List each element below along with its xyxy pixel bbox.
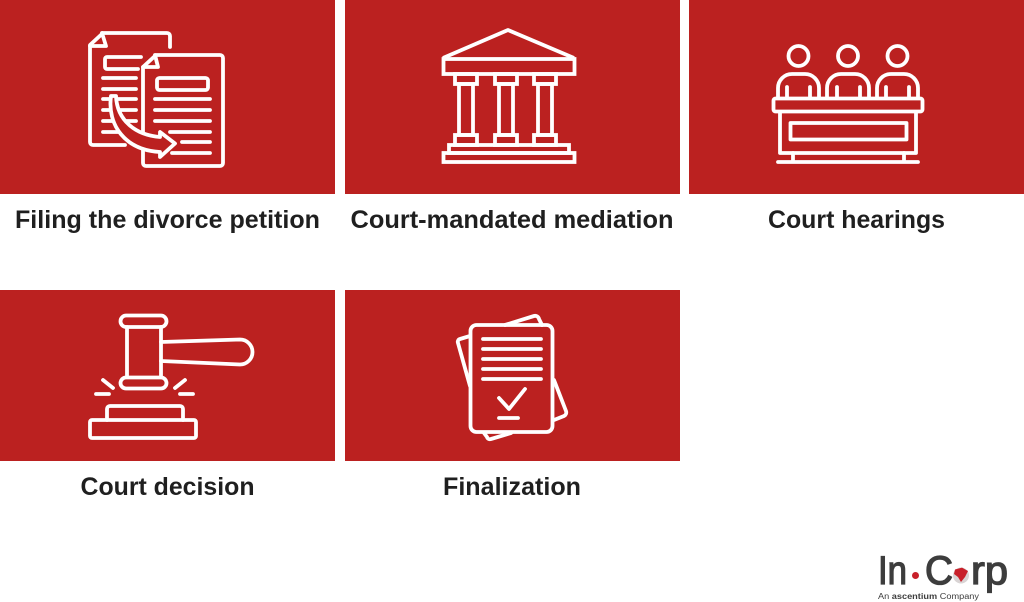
logo: InCorp: rp <box>971 549 1008 593</box>
icon: panel of judges <box>774 46 922 162</box>
icon: courthouse <box>443 30 574 162</box>
label: court hearings: Court hearings <box>768 206 945 234</box>
panel: finalization <box>345 290 680 461</box>
label: court decision: Court decision <box>80 473 254 501</box>
label: court-mandated mediation: Court-mandated mediation <box>350 206 674 234</box>
icon: globe <box>953 568 969 584</box>
icon: signed documents <box>458 316 566 439</box>
logo: InCorp: An ascentium Company <box>878 592 979 601</box>
label: finalization: Finalization <box>443 473 581 501</box>
panel: court decision <box>0 290 335 461</box>
panel: court hearings <box>689 0 1024 194</box>
panel: court-mandated mediation <box>345 0 680 194</box>
icon: gavel <box>90 316 252 438</box>
icon: documents with transfer arrow <box>90 33 223 166</box>
logo: InCorp: In <box>878 549 907 593</box>
logo: InCorp: C <box>925 549 953 593</box>
panel: filing the divorce petition <box>0 0 335 194</box>
label: filing the divorce petition: Filing the divorce petition <box>15 206 320 234</box>
logo: InCorp <box>878 549 1008 601</box>
